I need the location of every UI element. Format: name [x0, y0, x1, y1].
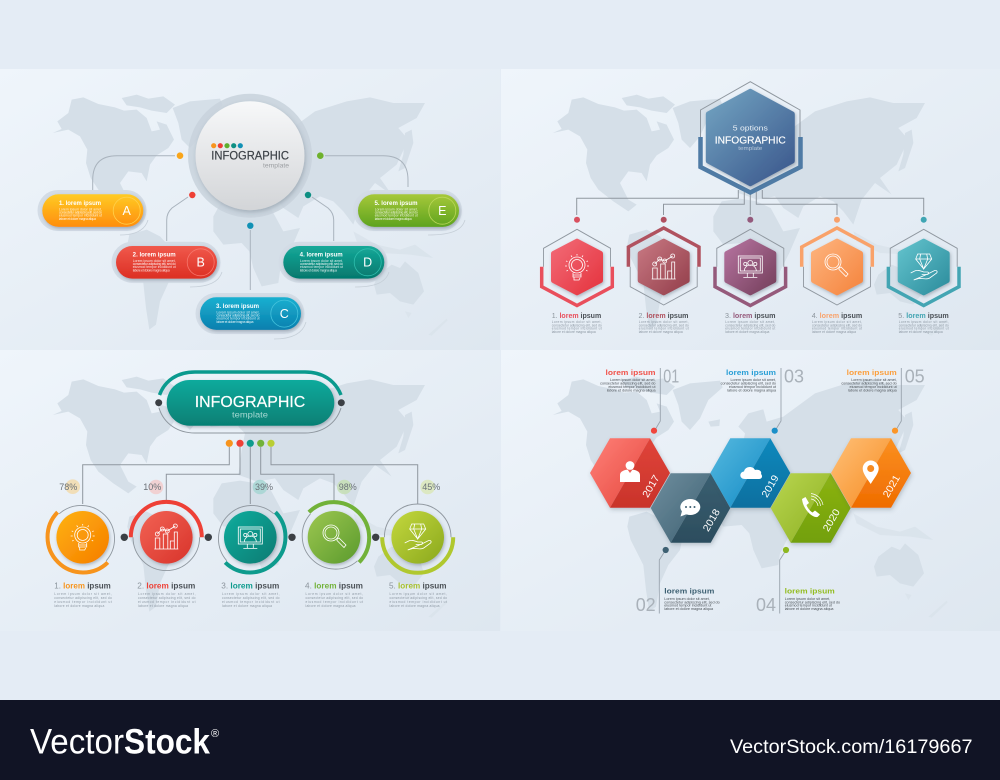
icon: person	[620, 461, 640, 482]
capsule D: eiusmod tempor incididunt ut	[300, 265, 343, 269]
capsule E	[353, 190, 465, 235]
option 5: eiusmod tempor incididunt ut	[899, 327, 949, 331]
circle 2: consectetur adipiscing elit, sed do	[138, 596, 196, 600]
callout 01: Lorem ipsum dolor sit amet,	[610, 378, 656, 382]
circle 5: Lorem ipsum dolor sit amet,	[390, 592, 447, 596]
option 1	[542, 217, 612, 334]
circle 4: labore et dolore magna aliqua	[306, 604, 356, 608]
callout 03: lorem ipsum	[726, 368, 776, 377]
circle 3	[218, 480, 285, 608]
callout 04: consectetur adipiscing elit, sed do	[785, 600, 840, 604]
callout 05: Lorem ipsum dolor sit amet,	[851, 378, 897, 382]
circle 2: 10%	[143, 482, 161, 492]
option 2: labore et dolore magna aliqua	[639, 330, 683, 334]
circle 2: 2. lorem ipsum	[137, 582, 195, 590]
callout 05: consectetur adipiscing elit, sed do	[841, 382, 897, 386]
callout 05: labore et dolore magna aliqua	[848, 388, 898, 392]
icon: chat bubble	[680, 499, 700, 516]
capsule C: consectetur adipiscing elit, sed do	[216, 314, 260, 318]
callout 02: 02	[636, 595, 656, 615]
capsule E: eiusmod tempor incididunt ut	[375, 214, 418, 218]
capsule D	[278, 242, 389, 287]
circle 1: Lorem ipsum dolor sit amet,	[54, 592, 112, 596]
option 4: 4. lorem ipsum	[812, 311, 863, 320]
callout 04: Lorem ipsum dolor sit amet,	[785, 597, 830, 601]
capsule B: Lorem ipsum dolor sit amet,	[133, 259, 176, 263]
capsule A: labore et dolore magna aliqua	[59, 217, 96, 221]
callout 02	[636, 586, 720, 615]
callout 01	[600, 366, 679, 392]
option 1: eiusmod tempor incididunt ut	[552, 327, 602, 331]
timeline dots	[651, 428, 898, 553]
circle 2	[131, 480, 202, 608]
circle 1: 1. lorem ipsum	[54, 582, 111, 590]
callout 02: Lorem ipsum dolor sit amet,	[664, 597, 710, 601]
callout 04: labore et dolore magna aliqua	[785, 607, 834, 611]
registered mark: ®	[211, 728, 219, 740]
callout 03	[721, 366, 804, 392]
circle 1	[48, 479, 115, 608]
callout 03: labore et dolore magna aliqua	[727, 388, 777, 392]
option 2: 2. lorem ipsum	[638, 311, 689, 320]
capsule C: eiusmod tempor incididunt ut	[216, 317, 260, 321]
capsule B: eiusmod tempor incididunt ut	[133, 265, 176, 269]
circle 5: consectetur adipiscing elit, sed do	[390, 596, 447, 600]
capsule B: consectetur adipiscing elit, sed do	[133, 262, 176, 266]
circle 4: eiusmod tempor incididunt ut	[306, 600, 363, 604]
option 5: consectetur adipiscing elit, sed do	[899, 323, 949, 327]
hexagon 2018: 2018	[701, 507, 723, 534]
hexagon 2020: 2020	[821, 507, 843, 534]
circle 1: eiusmod tempor incididunt ut	[54, 600, 112, 604]
option 2: consectetur adipiscing elit, sed do	[639, 323, 689, 327]
hexagon 2017	[590, 438, 670, 508]
option 1: labore et dolore magna aliqua	[552, 330, 596, 334]
panel: circle with capsule options	[0, 69, 500, 350]
callout 04: lorem ipsum	[785, 586, 835, 595]
connector lines	[577, 190, 924, 215]
panel: hexagon timeline	[501, 350, 1000, 631]
circle 4: consectetur adipiscing elit, sed do	[306, 596, 363, 600]
option 2: Lorem ipsum dolor sit amet,	[639, 320, 689, 324]
capsule C: Lorem ipsum dolor sit amet,	[216, 310, 260, 314]
callout 02: consectetur adipiscing elit, sed do	[664, 600, 720, 604]
option 1: Lorem ipsum dolor sit amet,	[552, 320, 602, 324]
circle 3: labore et dolore magna aliqua	[222, 604, 272, 608]
footer logo: VectorStock	[30, 722, 210, 762]
circle 5: 5. lorem ipsum	[389, 582, 447, 590]
circle 3: Lorem ipsum dolor sit amet,	[222, 592, 280, 596]
connector lines	[93, 156, 408, 290]
option 3: labore et dolore magna aliqua	[725, 330, 769, 334]
callout 03: eiusmod tempor incididunt ut	[729, 385, 776, 389]
capsule B	[112, 242, 222, 287]
footer band	[0, 700, 1000, 780]
circle 4: Lorem ipsum dolor sit amet,	[306, 592, 363, 596]
capsule E: 5. lorem ipsum	[374, 201, 418, 207]
capsule A: A	[123, 204, 132, 218]
circle 4	[302, 480, 369, 608]
title capsule: INFOGRAPHIC	[195, 394, 305, 411]
option 2: eiusmod tempor incididunt ut	[639, 327, 689, 331]
circle 2: labore et dolore magna aliqua	[138, 604, 188, 608]
central circle	[188, 94, 312, 218]
central circle: INFOGRAPHIC	[211, 150, 289, 162]
circle 1: consectetur adipiscing elit, sed do	[54, 596, 112, 600]
circle 1: 78%	[59, 482, 77, 492]
capsule C: labore et dolore magna aliqua	[216, 320, 254, 324]
hexagon 2021: 2021	[881, 473, 903, 500]
image id: VectorStock.com/16179667	[730, 737, 972, 758]
capsule B: B	[197, 256, 205, 270]
option 1: consectetur adipiscing elit, sed do	[552, 323, 602, 327]
capsule C: 3. lorem ipsum	[216, 304, 259, 310]
callout 01: labore et dolore magna aliqua	[607, 388, 656, 392]
option 4: labore et dolore magna aliqua	[812, 330, 856, 334]
option 2	[628, 217, 699, 334]
circle 4: 4. lorem ipsum	[305, 582, 363, 590]
option 5: labore et dolore magna aliqua	[899, 330, 943, 334]
main hexagon: INFOGRAPHIC	[715, 136, 786, 146]
callout 01: eiusmod tempor incididunt ut	[608, 385, 656, 389]
capsule A: 1. lorem ipsum	[59, 201, 101, 207]
title capsule	[155, 372, 345, 433]
circle 5	[382, 480, 453, 608]
option 5: Lorem ipsum dolor sit amet,	[899, 320, 949, 324]
option 5	[888, 217, 959, 334]
option 4	[802, 217, 872, 334]
callout 05	[841, 366, 925, 392]
option 3	[715, 217, 786, 334]
colour dots	[226, 440, 275, 447]
capsule C	[196, 293, 306, 339]
capsule D: 4. lorem ipsum	[300, 253, 343, 259]
option 1: 1. lorem ipsum	[552, 311, 602, 320]
capsule E: consectetur adipiscing elit, sed do	[375, 211, 418, 215]
capsule E: labore et dolore magna aliqua	[375, 217, 412, 221]
option 3: consectetur adipiscing elit, sed do	[725, 323, 775, 327]
circle 3: 39%	[255, 482, 273, 492]
panel: hexagon hierarchy	[501, 69, 1000, 350]
hexagon 2017: 2017	[641, 473, 663, 500]
capsule D: Lorem ipsum dolor sit amet,	[300, 259, 343, 263]
callout lines	[655, 368, 901, 614]
capsule A: Lorem ipsum dolor sit amet,	[59, 208, 102, 212]
circle 3: eiusmod tempor incididunt ut	[222, 600, 280, 604]
circle 5: eiusmod tempor incididunt ut	[390, 600, 447, 604]
callout 04	[756, 586, 840, 615]
option 3: Lorem ipsum dolor sit amet,	[725, 320, 775, 324]
option 3: 3. lorem ipsum	[725, 311, 776, 320]
circle 3: 3. lorem ipsum	[221, 582, 279, 590]
callout 02: eiusmod tempor incididunt ut	[664, 604, 711, 608]
circle 2: Lorem ipsum dolor sit amet,	[138, 592, 196, 596]
link dots	[121, 534, 379, 541]
option 4: consectetur adipiscing elit, sed do	[812, 323, 862, 327]
capsule B: 2. lorem ipsum	[133, 253, 176, 259]
option 4: Lorem ipsum dolor sit amet,	[812, 320, 862, 324]
capsule D: labore et dolore magna aliqua	[300, 268, 337, 272]
callout 01: lorem ipsum	[606, 368, 656, 377]
hexagon 2019	[710, 438, 790, 508]
icon: map pin	[863, 460, 879, 484]
main hexagon: template	[738, 146, 763, 152]
callout 03: consectetur adipiscing elit, sed do	[721, 382, 776, 386]
icon: cloud	[740, 467, 762, 479]
capsule A	[38, 190, 148, 235]
circle 3: consectetur adipiscing elit, sed do	[222, 596, 280, 600]
callout 01: consectetur adipiscing elit, sed do	[600, 382, 656, 386]
hexagon 2021	[831, 438, 911, 508]
capsule D: D	[363, 256, 372, 270]
circle 5: labore et dolore magna aliqua	[390, 604, 440, 608]
callout 01: 01	[663, 366, 679, 386]
callout 05: lorem ipsum	[847, 368, 897, 377]
callout 03: Lorem ipsum dolor sit amet,	[730, 378, 776, 382]
central circle: template	[263, 163, 290, 169]
hexagon 2019: 2019	[760, 473, 782, 500]
main hexagon: 5 options	[733, 124, 768, 132]
capsule D: consectetur adipiscing elit, sed do	[300, 262, 343, 266]
callout 02: labore et dolore magna aliqua	[664, 607, 714, 611]
option 3: eiusmod tempor incididunt ut	[725, 327, 775, 331]
capsule C: C	[280, 307, 289, 321]
callout 04: 04	[756, 595, 776, 615]
option 5: 5. lorem ipsum	[898, 311, 949, 320]
connector lines	[83, 447, 418, 504]
circle 5: 45%	[422, 482, 440, 492]
capsule A: consectetur adipiscing elit, sed do	[59, 211, 102, 215]
main hexagon	[700, 82, 800, 192]
capsule B: labore et dolore magna aliqua	[133, 268, 170, 272]
circle 1: labore et dolore magna aliqua	[54, 604, 104, 608]
callout 05: eiusmod tempor incididunt ut	[850, 385, 897, 389]
title capsule: template	[232, 410, 269, 420]
capsule E: Lorem ipsum dolor sit amet,	[375, 208, 418, 212]
icon: phone	[802, 494, 823, 517]
circle 2: eiusmod tempor incididunt ut	[138, 600, 196, 604]
callout 02: lorem ipsum	[664, 586, 715, 595]
callout 04: eiusmod tempor incididunt ut	[785, 604, 832, 608]
capsule E: E	[438, 204, 446, 218]
panel: circles with percentages	[0, 350, 500, 631]
callout 05: 05	[905, 366, 925, 386]
hexagon 2020	[771, 473, 851, 543]
option 4: eiusmod tempor incididunt ut	[812, 327, 862, 331]
capsule A: eiusmod tempor incididunt ut	[59, 214, 102, 218]
connector dots	[177, 152, 324, 229]
circle 4: 98%	[339, 482, 357, 492]
callout 03: 03	[784, 366, 804, 386]
hexagon 2018	[651, 473, 730, 543]
